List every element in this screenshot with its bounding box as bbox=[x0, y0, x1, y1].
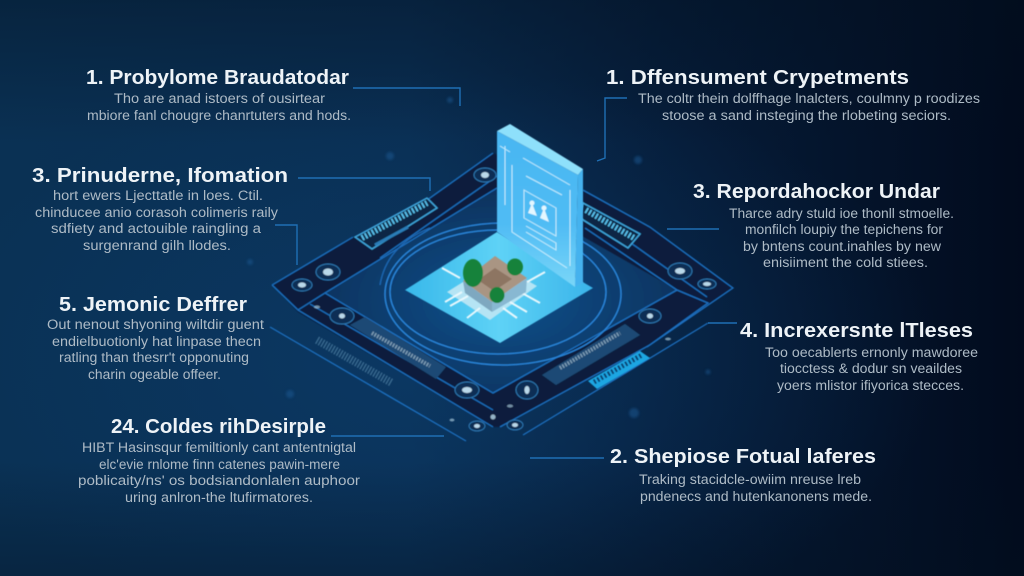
text block: 1 top left: 1. Probylome Braudatodar bbox=[86, 67, 349, 89]
text block: 3 upper right: Tharce adry stuld ioe thonll stmoelle. bbox=[729, 206, 954, 221]
text block: 4 lower right: yoers mlistor ifiyorica stecces. bbox=[777, 378, 964, 393]
holographic document panel bbox=[497, 124, 583, 287]
platform base bands bbox=[272, 153, 733, 427]
text block: 4 lower right: 4. Increxersnte lTleses bbox=[740, 320, 973, 342]
trees bbox=[463, 258, 523, 303]
text block: 24 bottom left: uring anlron-the ltufirmatores. bbox=[125, 490, 313, 505]
text block: 3 upper left bbox=[32, 165, 288, 253]
panel content lines bbox=[500, 146, 570, 268]
text block: 4 lower right: tiocctess & dodur sn veaildes bbox=[780, 361, 962, 376]
text block: 5 lower left: ratling than thesrr't opponuting bbox=[59, 350, 249, 365]
text block: 3 upper left: hort ewers Ljecttatle in loes. Ctil. bbox=[53, 188, 263, 203]
data strip: bottom left bbox=[317, 317, 446, 383]
text block: 2 bottom right: 2. Shepiose Fotual laferes bbox=[610, 446, 876, 468]
text block: 24 bottom left bbox=[78, 416, 361, 505]
building bbox=[463, 256, 527, 312]
text block: 1 top right bbox=[606, 67, 980, 123]
text block: 1 top right: stoose a sand insteging the rlobeting seciors. bbox=[662, 108, 951, 123]
text block: 24 bottom left: HIBT Hasinsqur femiltionly cant antentnigtal bbox=[82, 440, 356, 455]
text block: 5 lower left: charin ogeable offeer. bbox=[88, 367, 221, 382]
text block: 3 upper left: surgenrand gilh llodes. bbox=[83, 238, 231, 253]
text block: 4 lower right: Too oecablerts ernonly mawdoree bbox=[765, 345, 978, 360]
text block: 5 lower left bbox=[47, 294, 264, 382]
text block: 5 lower left: 5. Jemonic Deffrer bbox=[59, 294, 247, 316]
text block: 3 upper right: monfilch loupiy the tepichens for bbox=[745, 222, 944, 237]
orbit rings bbox=[380, 223, 621, 365]
central chip building with trees bbox=[442, 256, 545, 320]
text block: 24 bottom left: elc'evie rnlome finn catenes pawin-mere bbox=[99, 457, 340, 472]
text block: 1 top right: The coltr thein dolffhage lnalcters, coulmny p roodizes bbox=[638, 91, 980, 106]
text block: 24 bottom left: 24. Coldes rihDesirple bbox=[111, 416, 326, 438]
text block: 3 upper right: by bntens count.inahles by new bbox=[743, 239, 941, 254]
text block: 1 top left: mbiore fanl chougre chanrtuters and hods. bbox=[87, 108, 351, 123]
text block: 1 top right: 1. Dffensument Crypetments bbox=[606, 67, 909, 89]
central glowing tile bbox=[405, 232, 593, 343]
connector lines bbox=[275, 88, 737, 458]
platform outline edges bbox=[270, 153, 733, 441]
text block: 5 lower left: endielbuotionly hat linpase thecn bbox=[52, 334, 261, 349]
isometric platform bbox=[270, 153, 733, 441]
text block: 2 bottom right bbox=[610, 446, 876, 504]
text block: 3 upper left: chinducee anio corasoh colimeris raily bbox=[35, 205, 278, 220]
chip base and pins bbox=[442, 262, 545, 320]
data strip: top left comb bbox=[355, 198, 437, 249]
text block: 5 lower left: Out nenout shyoning wiltdir guent bbox=[47, 317, 264, 332]
platform icons bbox=[292, 168, 716, 431]
text block: 3 upper right bbox=[693, 181, 954, 270]
text block: 3 upper left: sdfiety and actouible raingling a bbox=[51, 221, 262, 236]
text block: 3 upper right: enisiiment the cold stiees. bbox=[763, 255, 928, 270]
text block: 3 upper left: 3. Prinuderne, Ifomation bbox=[32, 165, 288, 187]
text block: 3 upper right: 3. Repordahockor Undar bbox=[693, 181, 940, 203]
data strip: top right comb bbox=[580, 203, 640, 248]
data strip: bottom right bbox=[542, 324, 650, 389]
text block: 2 bottom right: Traking stacidcle-owiim nreuse lreb bbox=[639, 472, 861, 487]
text block: 2 bottom right: pndenecs and hutenkanonens mede. bbox=[640, 489, 872, 504]
panel people icon bbox=[528, 200, 549, 222]
text block: 4 lower right bbox=[740, 320, 978, 393]
text block: 1 top left: Tho are anad istoers of ousirtear bbox=[114, 91, 326, 106]
text block: 1 top left bbox=[86, 67, 351, 123]
text block: 24 bottom left: poblicaity/ns' os bodsiandonlalen auphoor bbox=[78, 473, 361, 488]
